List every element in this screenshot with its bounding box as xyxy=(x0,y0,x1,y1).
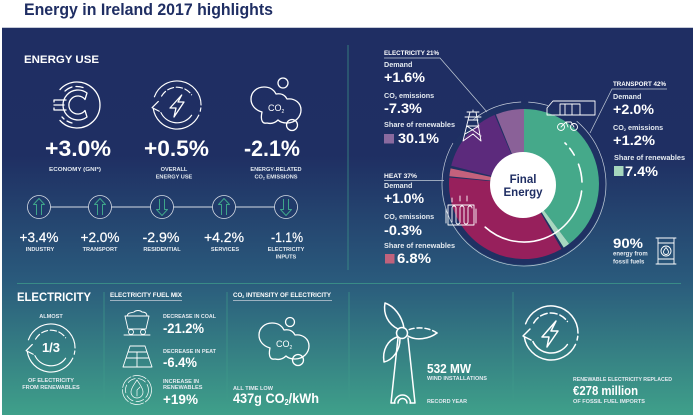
label: almost: ALMOST xyxy=(39,314,63,320)
emissions: 2 xyxy=(624,127,627,132)
demand: Demand xyxy=(613,92,641,101)
slice: transport xyxy=(524,109,599,244)
stat: electricity inputs: ELECTRICITY xyxy=(268,247,304,253)
centre circle xyxy=(490,152,556,218)
stat: renewables: INCREASE IN xyxy=(163,379,199,385)
demand: Demand xyxy=(384,181,412,190)
icon: CO2 cloud xyxy=(251,78,301,130)
stat: fossil fuel imports xyxy=(573,377,672,405)
stat: all time low: 437g CO xyxy=(233,391,288,406)
renewables: Share of renewables xyxy=(384,120,455,129)
stat: services: +4.2% xyxy=(204,229,244,245)
emissions: 2 xyxy=(395,95,398,100)
outer ring xyxy=(442,102,606,266)
dark band around pie xyxy=(443,103,605,265)
icon: renewable energy cycle xyxy=(523,306,578,360)
icon: CO2 cloud: 2 xyxy=(282,109,284,115)
sector connector line xyxy=(39,206,286,208)
centre label: Final xyxy=(510,174,536,186)
heading: HEAT 37% xyxy=(384,174,418,180)
stat: fossil fuel imports: €278 million xyxy=(573,383,638,398)
renewables xyxy=(384,120,455,146)
slice: electricity xyxy=(451,115,524,184)
stat: fossil fuels xyxy=(613,235,648,266)
value: overall energy use: +0.5% xyxy=(144,136,209,161)
emissions xyxy=(384,212,434,238)
label: CO2 emissions: CO xyxy=(255,174,264,180)
centre label: Energy xyxy=(504,187,543,199)
demand: +2.0% xyxy=(613,101,655,117)
icon: up arrow industry xyxy=(28,196,50,218)
heading: fuel mix: ELECTRICITY FUEL MIX xyxy=(110,293,182,299)
heading: TRANSPORT 42% xyxy=(613,82,667,88)
stat: peat: -6.4% xyxy=(163,354,198,370)
icon: bus and bike xyxy=(547,101,595,130)
stat: fossil fuels: 90% xyxy=(613,235,644,251)
heading: ELECTRICITY 21% xyxy=(384,51,440,57)
title: Energy in Ireland 2017 highlights xyxy=(24,1,273,19)
leader line xyxy=(384,180,444,182)
icon: down arrow residential xyxy=(150,196,174,218)
slice: heat xyxy=(449,178,562,259)
renewables: 6.8% xyxy=(397,250,432,266)
demand: Demand xyxy=(384,60,412,69)
slice: transport renewables xyxy=(524,184,569,248)
stat: services xyxy=(204,229,244,253)
emissions: -7.3% xyxy=(384,100,423,116)
label: CO2 emissions: 2 xyxy=(263,176,265,180)
stat: residential: RESIDENTIAL xyxy=(143,247,181,253)
stat: coal xyxy=(163,314,217,336)
heading: CO2 intensity: 2 xyxy=(242,295,244,299)
value: one third: 1/3 xyxy=(42,340,60,355)
stat: all time low: ALL TIME LOW xyxy=(233,386,274,392)
stat: transport: TRANSPORT xyxy=(83,247,118,253)
icon: CO2 cloud: CO xyxy=(268,103,282,113)
emissions: emissions xyxy=(397,212,434,221)
stat: renewables: RENEWABLES xyxy=(163,385,203,391)
panel: electricity xyxy=(17,290,672,407)
renewables: 7.4% xyxy=(625,163,659,179)
emissions: CO xyxy=(613,123,624,132)
renewables xyxy=(384,241,455,266)
emissions: +1.2% xyxy=(613,132,656,148)
icon: wind turbine xyxy=(384,303,437,403)
stat: wind: RECORD YEAR xyxy=(427,399,467,405)
renewables: 30.1% xyxy=(398,130,440,146)
emissions: CO xyxy=(384,212,395,221)
demand: +1.6% xyxy=(384,69,426,85)
label: from renewables: FROM RENEWABLES xyxy=(22,385,80,391)
icon: CO2 cloud large: 2 xyxy=(290,345,292,351)
label: CO2 emissions: ENERGY-RELATED xyxy=(250,167,302,173)
stat: transport xyxy=(80,229,120,253)
stat: coal: -21.2% xyxy=(163,320,205,336)
label: from renewables: OF ELECTRICITY xyxy=(28,378,74,384)
icon: down arrow electricity inputs xyxy=(274,196,298,218)
icon: one third ring xyxy=(26,324,75,372)
renewables: Share of renewables xyxy=(384,241,455,250)
leader line xyxy=(384,58,487,112)
renewables: Share of renewables xyxy=(614,153,685,162)
label: CO2 emissions: EMISSIONS xyxy=(265,174,298,180)
panel: transport stats xyxy=(590,82,685,179)
icon: energy cycle xyxy=(152,81,201,129)
icon: radiator xyxy=(446,196,476,225)
stat: electricity inputs: INPUTS xyxy=(276,254,297,260)
stat: residential: -2.9% xyxy=(142,229,180,245)
label: economy: ECONOMY (GNI*) xyxy=(49,167,101,173)
icon: up arrow services xyxy=(212,196,236,218)
slice: heat renewables xyxy=(449,168,524,184)
demand xyxy=(613,92,655,117)
stat: fossil fuel imports: OF FOSSIL FUEL IMPORTS xyxy=(573,399,645,405)
icon: peat bricks xyxy=(123,346,152,367)
stat: fossil fuels: energy from xyxy=(613,252,648,258)
chart: final energy pie xyxy=(442,102,606,266)
stat: transport: +2.0% xyxy=(80,229,120,245)
icon: renewables drop xyxy=(122,376,152,404)
demand: +1.0% xyxy=(384,190,425,206)
demand xyxy=(384,181,425,206)
icon: fuel barrel xyxy=(656,238,676,264)
stat: electricity inputs xyxy=(268,229,305,260)
stat: industry: INDUSTRY xyxy=(26,247,54,253)
stat: all time low: 2 xyxy=(284,398,289,407)
stat: all time low xyxy=(233,386,319,407)
stat: all time low: /kWh xyxy=(289,391,319,406)
emissions xyxy=(384,91,434,116)
emissions: emissions xyxy=(626,123,663,132)
panel: heat stats xyxy=(384,174,455,266)
icon: CO2 cloud large: CO xyxy=(276,339,290,349)
icon: euro economy xyxy=(54,82,100,128)
label: overall energy use: ENERGY USE xyxy=(156,174,193,180)
white inner arc xyxy=(485,143,582,242)
stat: fossil fuel imports: RENEWABLE ELECTRICITY REPLACED xyxy=(573,377,672,383)
icon: CO2 cloud large xyxy=(259,318,309,366)
demand xyxy=(384,60,426,85)
stat: industry xyxy=(20,229,58,253)
stat: wind xyxy=(427,361,487,405)
label: overall energy use: OVERALL xyxy=(161,167,187,173)
heading: CO2 intensity: CO xyxy=(233,293,242,299)
icon: up arrow transport xyxy=(88,196,112,218)
icon: pylon xyxy=(463,110,481,141)
heading: CO2 intensity: INTENSITY OF ELECTRICITY xyxy=(244,293,331,299)
value: economy: +3.0% xyxy=(45,136,111,161)
heading: electricity: ELECTRICITY xyxy=(17,290,91,304)
stat: services: SERVICES xyxy=(211,247,239,253)
stat: industry: +3.4% xyxy=(20,229,58,245)
stat: wind: WIND INSTALLATIONS xyxy=(427,376,487,382)
renewables xyxy=(614,153,685,179)
stat: fossil fuels: fossil fuels xyxy=(613,260,645,266)
stat: wind: 532 MW xyxy=(427,361,472,376)
icon: coal cart xyxy=(124,310,150,335)
stat: peat: DECREASE IN PEAT xyxy=(163,349,217,355)
emissions: emissions xyxy=(397,91,434,100)
emissions xyxy=(613,123,663,148)
emissions: 2 xyxy=(395,216,398,221)
panel: energy use xyxy=(20,54,305,260)
heading: energy use: ENERGY USE xyxy=(24,54,99,66)
leader line xyxy=(590,89,667,133)
stat: electricity inputs: -1.1% xyxy=(271,229,303,245)
panel: electricity stats xyxy=(384,51,487,146)
value: CO2 emissions: -2.1% xyxy=(244,136,300,161)
stat: coal: DECREASE IN COAL xyxy=(163,314,217,320)
emissions: CO xyxy=(384,91,395,100)
stat: residential xyxy=(142,229,181,253)
stat: peat xyxy=(163,349,217,370)
stat: renewables: +19% xyxy=(163,391,199,407)
slice: electricity renewables xyxy=(496,109,524,184)
stat: renewables xyxy=(163,379,203,407)
emissions: -0.3% xyxy=(384,222,423,238)
